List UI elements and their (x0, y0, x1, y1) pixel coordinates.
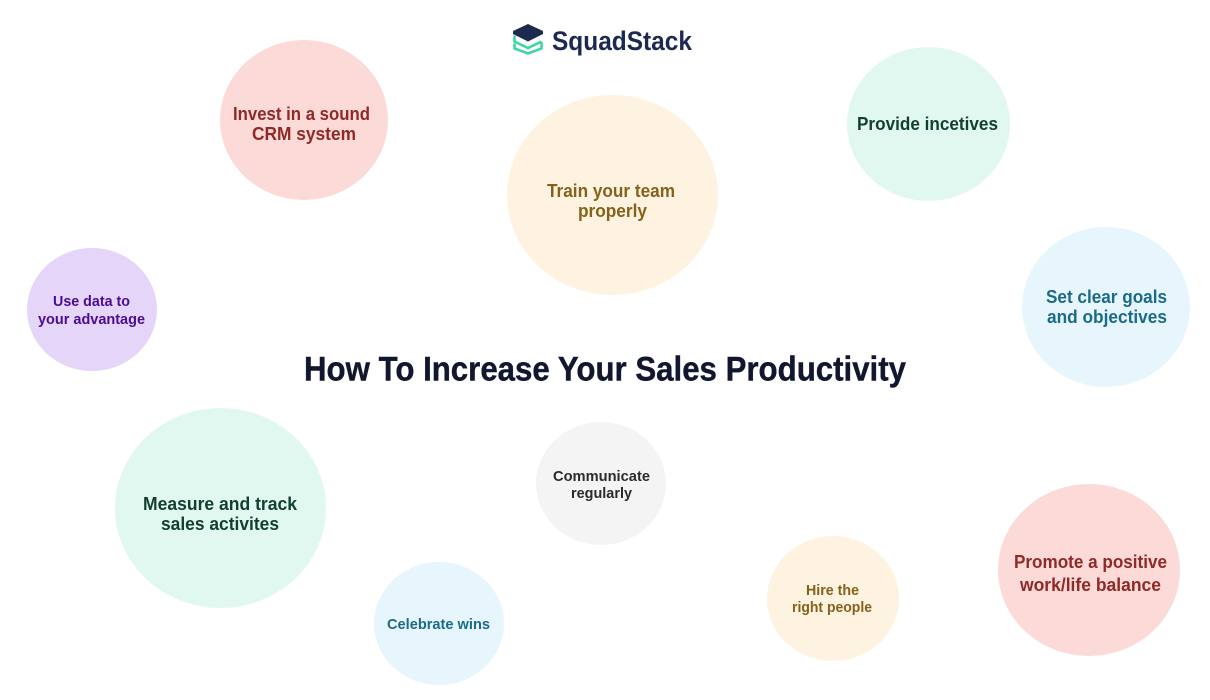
bubble: Train your team properly (507, 95, 718, 295)
bubble: Communicate regularly: Communicate (553, 468, 650, 485)
bubble: Train your team properly: properly (578, 201, 647, 221)
bubble: Hire the right people (767, 536, 899, 661)
bubble: Celebrate wins: Celebrate wins (387, 616, 490, 633)
icon: stacked layers (513, 24, 543, 54)
bubble: Set clear goals and objectives: Set clear goals (1046, 287, 1167, 307)
bubble: Measure and track sales activites: sales activites (161, 514, 279, 534)
bubble: Invest in a sound CRM system (220, 40, 388, 200)
bubble: Invest in a sound CRM system: CRM system (252, 124, 356, 144)
bubble: Set clear goals and objectives (1022, 227, 1190, 387)
bubble: Provide incetives (847, 47, 1010, 201)
bubble: Set clear goals and objectives: and objectives (1047, 307, 1167, 327)
bubble: Train your team properly: Train your team (547, 181, 675, 201)
bubble: Communicate regularly: regularly (571, 485, 633, 502)
logo: SquadStack (513, 24, 692, 56)
logo wordmark: SquadStack (552, 26, 692, 56)
bubble: Celebrate wins (374, 562, 504, 685)
bubble: Hire the right people: right people (792, 599, 872, 616)
bubble: Promote a positive work/life balance: Promote a positive (1014, 552, 1167, 572)
bubble: Use data to your advantage: your advantage (38, 311, 145, 328)
bubble: Communicate regularly (536, 422, 666, 545)
bubble: Hire the right people: Hire the (806, 582, 859, 599)
bubble: Promote a positive work/life balance: work/life balance (1019, 575, 1161, 595)
title: How To Increase Your Sales Productivity (304, 350, 906, 388)
bubble: Measure and track sales activites: Measure and track (143, 494, 298, 514)
bubble: Provide incetives: Provide incetives (857, 114, 998, 134)
bubble: Measure and track sales activites (115, 408, 326, 608)
bubble: Promote a positive work/life balance (998, 484, 1180, 656)
bubble: Use data to your advantage: Use data to (53, 293, 130, 310)
bubble: Invest in a sound CRM system: Invest in a sound (233, 104, 370, 124)
bubble: Use data to your advantage (27, 248, 157, 371)
